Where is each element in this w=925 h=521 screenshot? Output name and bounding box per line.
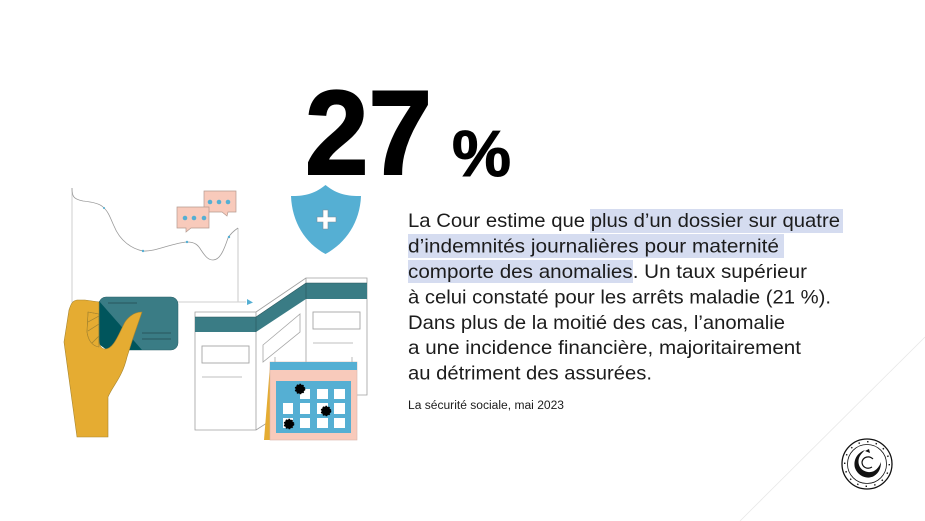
icon: speech bubbles (177, 191, 236, 232)
logo (842, 439, 892, 489)
illustration: folded document (195, 278, 367, 430)
body text: à celui constaté pour les arrêts maladie (21 %). (408, 286, 831, 308)
body text: comporte des anomalies. Un taux supérieur (408, 261, 808, 283)
body text: La Cour estime que plus d’un dossier sur quatre (408, 210, 840, 232)
big number: 27 %: 27 (305, 66, 432, 200)
body text (408, 210, 840, 384)
chart: curve over axes (72, 188, 253, 305)
source: La sécurité sociale, mai 2023 (408, 400, 564, 412)
highlight behind key phrase (408, 209, 843, 283)
icon: shield with cross (291, 185, 361, 254)
body text: a une incidence financière, majoritairement (408, 337, 802, 359)
arrow: chart axis head (247, 299, 253, 305)
icon: calendar (264, 357, 357, 440)
body text: d’indemnités journalières pour maternité (408, 236, 779, 258)
icon: hand holding card (64, 297, 178, 437)
big number: 27 %: % (452, 117, 511, 190)
body text: Dans plus de la moitié des cas, l’anomalie (408, 312, 785, 334)
body text: au détriment des assurées. (408, 362, 652, 384)
big number: 27 % (305, 66, 511, 200)
